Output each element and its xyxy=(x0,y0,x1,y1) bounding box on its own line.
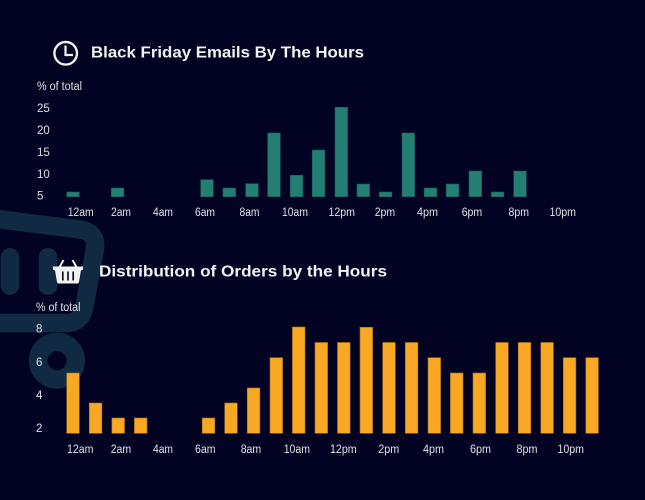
x axis labels: 8pm xyxy=(516,444,538,456)
x axis labels: 6pm xyxy=(462,207,482,219)
x axis labels: 4pm xyxy=(423,444,444,456)
x axis labels: 2am xyxy=(111,207,131,219)
y axis labels: 10 xyxy=(37,169,50,181)
x axis labels: 4am xyxy=(153,207,173,219)
y axis labels: 6 xyxy=(36,357,42,369)
x axis labels: 6am xyxy=(195,207,215,219)
x axis labels: 6am xyxy=(195,444,216,456)
y axis labels xyxy=(37,103,50,202)
x axis labels: 2am xyxy=(111,444,131,456)
y axis title: % of total xyxy=(36,302,80,314)
x axis labels: 12pm xyxy=(328,207,355,219)
x axis labels: 4am xyxy=(153,444,173,456)
icon: clock xyxy=(54,42,77,65)
y axis labels xyxy=(36,324,43,435)
x axis labels: 6pm xyxy=(470,444,491,456)
x axis labels: 8am xyxy=(241,444,261,456)
x axis labels: 2pm xyxy=(378,444,399,456)
y axis labels: 2 xyxy=(36,423,42,435)
x axis labels: 4pm xyxy=(417,207,438,219)
x axis labels: 8am xyxy=(240,207,260,219)
x axis labels: 2pm xyxy=(375,207,395,219)
x axis labels xyxy=(68,207,576,219)
x axis labels: 10pm xyxy=(550,207,576,219)
x axis labels xyxy=(67,444,584,456)
y axis title: % of total xyxy=(37,81,82,93)
y axis labels: 20 xyxy=(37,125,50,137)
chart: orders by hour xyxy=(36,302,598,456)
y axis labels: 4 xyxy=(36,390,43,402)
chart: emails by hour xyxy=(37,81,576,219)
background watermark: shopping cart xyxy=(0,218,95,380)
y axis labels: 25 xyxy=(37,103,50,115)
y axis labels: 8 xyxy=(36,324,42,336)
x axis labels: 8pm xyxy=(508,207,529,219)
icon: shopping basket xyxy=(53,260,83,284)
heading: Distribution of Orders: Distribution of Orders by the Hours xyxy=(99,264,387,280)
x axis labels: 10pm xyxy=(558,444,584,456)
x axis labels: 12pm xyxy=(330,444,357,456)
orange bars xyxy=(67,327,598,433)
x axis labels: 10am xyxy=(284,444,310,456)
x axis labels: 12am xyxy=(68,207,94,219)
heading: Black Friday Emails: Black Friday Emails By The Hours xyxy=(91,44,364,62)
y axis labels: 15 xyxy=(37,147,50,159)
y axis labels: 5 xyxy=(37,190,43,202)
x axis labels: 10am xyxy=(282,207,308,219)
teal bars xyxy=(67,107,526,197)
x axis labels: 12am xyxy=(67,444,94,456)
